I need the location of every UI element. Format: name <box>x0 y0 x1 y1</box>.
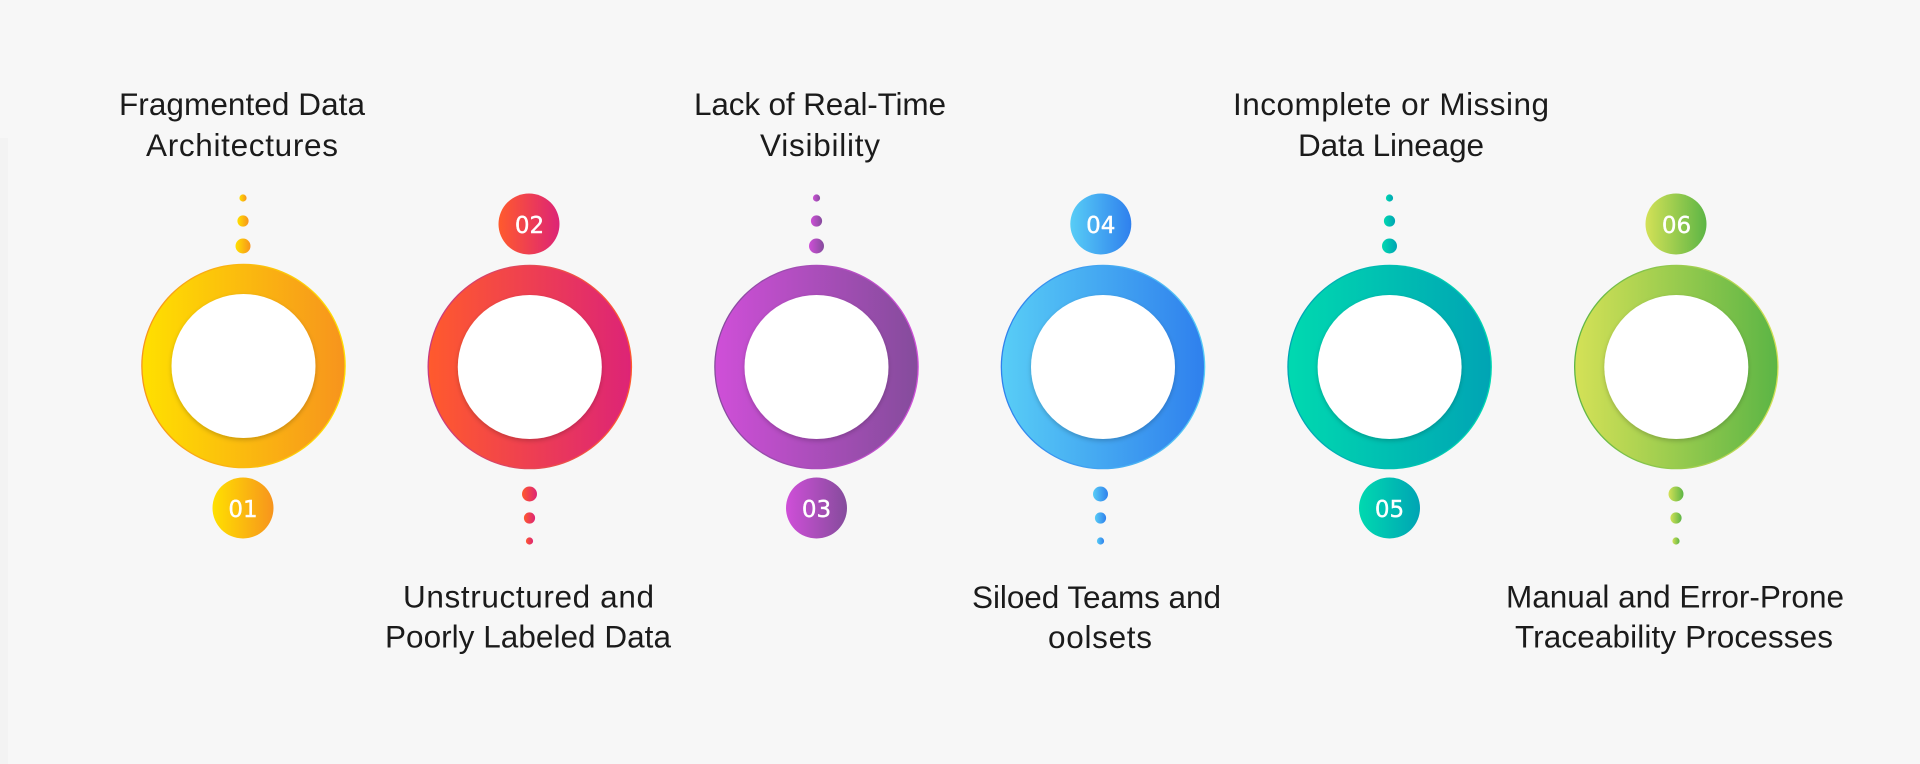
ring 06 <box>1574 265 1779 469</box>
ring 05 <box>1287 265 1492 469</box>
number badge 04: 04 <box>1086 213 1115 239</box>
heading 05 <box>1233 86 1549 163</box>
number badge 06: 06 <box>1662 213 1691 239</box>
number badge 01 <box>212 478 274 538</box>
number badge 03: 03 <box>802 497 831 523</box>
number badge 02: 02 <box>515 213 544 239</box>
dots 02 <box>522 486 537 545</box>
ring 02 <box>428 265 632 469</box>
step 02: Unstructured and Poorly Labeled Data <box>385 194 671 654</box>
number badge 01: 01 <box>228 497 258 523</box>
heading 02: Unstructured and <box>403 578 654 614</box>
heading 03: Lack of Real-Time <box>694 86 946 122</box>
heading 06: Traceability Processes <box>1515 618 1833 654</box>
step 06: Manual and Error-Prone Traceability Processes <box>1506 194 1844 654</box>
dots 03 <box>809 194 824 254</box>
heading 05: Incomplete or Missing <box>1233 86 1549 122</box>
dots 06 <box>1668 486 1684 545</box>
number badge 05 <box>1359 478 1420 538</box>
heading 06 <box>1506 578 1844 654</box>
heading 01: Architectures <box>146 127 338 163</box>
step 01: Fragmented Data Architectures <box>119 86 365 538</box>
heading 03 <box>694 86 946 163</box>
step 04: Siloed Teams and Toolsets <box>972 194 1221 655</box>
heading 04 <box>972 579 1221 655</box>
number badge 04 <box>1070 194 1131 254</box>
ring 04 <box>1001 265 1205 469</box>
heading 06: Manual and Error-Prone <box>1506 578 1844 614</box>
dots 01 <box>236 194 250 254</box>
step 03: Lack of Real-Time Visibility <box>694 86 946 538</box>
number badge 03 <box>786 478 847 538</box>
heading 04: Siloed Teams and <box>972 579 1221 615</box>
heading 05: Data Lineage <box>1298 127 1484 163</box>
heading 01 <box>119 86 365 163</box>
number badge 02 <box>498 194 560 254</box>
heading 02 <box>385 578 671 654</box>
ring 03 <box>714 265 919 469</box>
heading 02: Poorly Labeled Data <box>385 618 671 654</box>
number badge 06 <box>1646 194 1706 254</box>
ring 01 <box>141 264 346 468</box>
heading 01: Fragmented Data <box>119 86 365 122</box>
dots 04 <box>1093 486 1108 545</box>
number badge 05: 05 <box>1375 497 1404 523</box>
dots 05 <box>1382 194 1397 254</box>
heading 03: Visibility <box>760 127 880 163</box>
step 05: Incomplete or Missing Data Lineage <box>1233 86 1549 538</box>
heading 04: oolsets <box>1048 619 1152 655</box>
